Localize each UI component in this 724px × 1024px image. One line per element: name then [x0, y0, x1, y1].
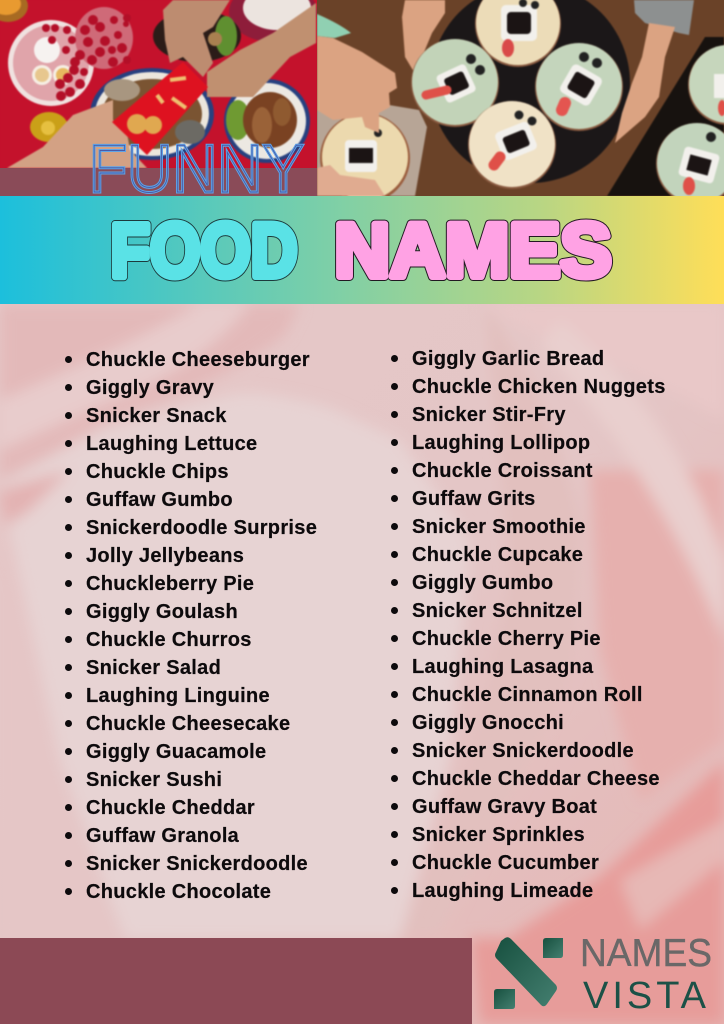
- footer: maroon block: [0, 938, 472, 1024]
- list: right column of food names: Giggly Gumbo: [412, 572, 553, 594]
- list: right column of food names: [391, 348, 666, 902]
- list: right column of food names: Guffaw Gravy Boat: [412, 796, 597, 818]
- banner: gradient title band: [0, 196, 724, 304]
- icon: black plate: [430, 0, 630, 183]
- icon: gold ingot: [30, 112, 68, 142]
- list: right column of food names: Chuckle Cinnamon Roll: [412, 684, 643, 706]
- icon: hand from top: [163, 0, 230, 77]
- list: right column of food names: Laughing Lollipop: [412, 432, 590, 454]
- list: left column of food names: Snicker Salad: [86, 657, 221, 679]
- list: left column of food names: Giggly Guacamole: [86, 741, 266, 763]
- icon: dark dish with greens: [153, 10, 241, 62]
- list: right column of food names: Laughing Limeade: [412, 880, 593, 902]
- icon: red berries: [42, 14, 131, 101]
- list: left column of food names: Snicker Snickerdoodle: [86, 853, 308, 875]
- heading: FOOD: FOOD: [110, 208, 298, 294]
- icon: donut green right: [535, 43, 623, 131]
- icon: donut green bottom right: [656, 123, 724, 205]
- text: VISTA: VISTA: [583, 975, 710, 1017]
- icon: donut cream bottom: [468, 101, 556, 189]
- list: left column of food names: Chuckleberry Pie: [86, 573, 254, 595]
- icon: donut green far right: [688, 45, 724, 125]
- list: right column of food names: Chuckle Croissant: [412, 460, 593, 482]
- photo: red envelope over Chinese dishes: [0, 0, 317, 196]
- list: right column of food names: Chuckle Cucumber: [412, 852, 599, 874]
- photo: vampire donuts on black plate: [317, 0, 724, 196]
- icon: donut cream top: [475, 0, 561, 67]
- list: left column of food names: Jolly Jellybeans: [86, 545, 244, 567]
- list: right column of food names: Laughing Lasagna: [412, 656, 593, 678]
- background: pink tulle fabric: [0, 304, 724, 1024]
- text: NAMES: NAMES: [580, 932, 712, 975]
- list: right column of food names: Snicker Smoothie: [412, 516, 586, 538]
- logo: Names Vista: [494, 932, 712, 1017]
- list: right column of food names: Snicker Snickerdoodle: [412, 740, 634, 762]
- list: right column of food names: Chuckle Cupcake: [412, 544, 583, 566]
- list: right column of food names: Chuckle Chicken Nuggets: [412, 376, 666, 398]
- icon: hand lower left: [317, 165, 385, 196]
- icon: rice plate: [229, 0, 317, 42]
- heading: FOOD: FOOD: [110, 208, 298, 294]
- list: left column of food names: Chuckle Cheesecake: [86, 713, 290, 735]
- list: left column of food names: Chuckle Chips: [86, 461, 229, 483]
- icon: grey sleeve: [634, 0, 694, 35]
- icon: red envelope: [112, 62, 208, 155]
- list: right column of food names: Guffaw Grits: [412, 488, 536, 510]
- heading: NAMES: NAMES: [334, 208, 612, 294]
- list: right column of food names: Snicker Schnitzel: [412, 600, 583, 622]
- icon: arm right: [615, 23, 675, 143]
- list: left column of food names: Giggly Goulash: [86, 601, 238, 623]
- icon: sleeve left: [317, 14, 351, 38]
- icon: hand left: [317, 36, 397, 133]
- icon: meat plate: [224, 79, 310, 163]
- list: right column of food names: Giggly Garlic Bread: [412, 348, 604, 370]
- icon: donut cream left tray: [320, 113, 410, 203]
- list: left column of food names: Guffaw Granola: [86, 825, 239, 847]
- list: left column of food names: Chuckle Cheeseburger: [86, 349, 310, 371]
- icon: glass bowl: [75, 7, 133, 69]
- list: left column of food names: Chuckle Cheddar: [86, 797, 255, 819]
- heading: NAMES: NAMES: [334, 208, 612, 294]
- list: right column of food names: Snicker Sprinkles: [412, 824, 585, 846]
- icon: arm top: [402, 0, 445, 72]
- icon: fish plate: [90, 68, 214, 160]
- icon: black tray right: [607, 37, 724, 196]
- band: maroon strip: [0, 168, 317, 196]
- list: left column of food names: Chuckle Chocolate: [86, 881, 271, 903]
- icon: hand from bottom left: [7, 100, 147, 168]
- icon: fruit basket: [0, 0, 28, 22]
- list: left column of food names: Chuckle Churros: [86, 629, 252, 651]
- list: left column of food names: Snicker Sushi: [86, 769, 222, 791]
- list: right column of food names: Giggly Gnocchi: [412, 712, 564, 734]
- list: left column of food names: Snickerdoodle Surprise: [86, 517, 317, 539]
- list: left column of food names: [65, 349, 317, 903]
- list: right column of food names: Chuckle Cherry Pie: [412, 628, 601, 650]
- icon: tea plate with cups: [8, 20, 94, 106]
- list: right column of food names: Snicker Stir-Fry: [412, 404, 566, 426]
- list: left column of food names: Snicker Snack: [86, 405, 227, 427]
- icon: logo mark: [494, 937, 563, 1009]
- list: right column of food names: Chuckle Cheddar Cheese: [412, 768, 660, 790]
- list: left column of food names: Laughing Lettuce: [86, 433, 257, 455]
- icon: tray left: [317, 105, 427, 196]
- icon: donut green left: [411, 39, 499, 127]
- list: left column of food names: Giggly Gravy: [86, 377, 214, 399]
- list: left column of food names: Guffaw Gumbo: [86, 489, 233, 511]
- icon: hand from right: [207, 3, 316, 97]
- list: left column of food names: Laughing Linguine: [86, 685, 270, 707]
